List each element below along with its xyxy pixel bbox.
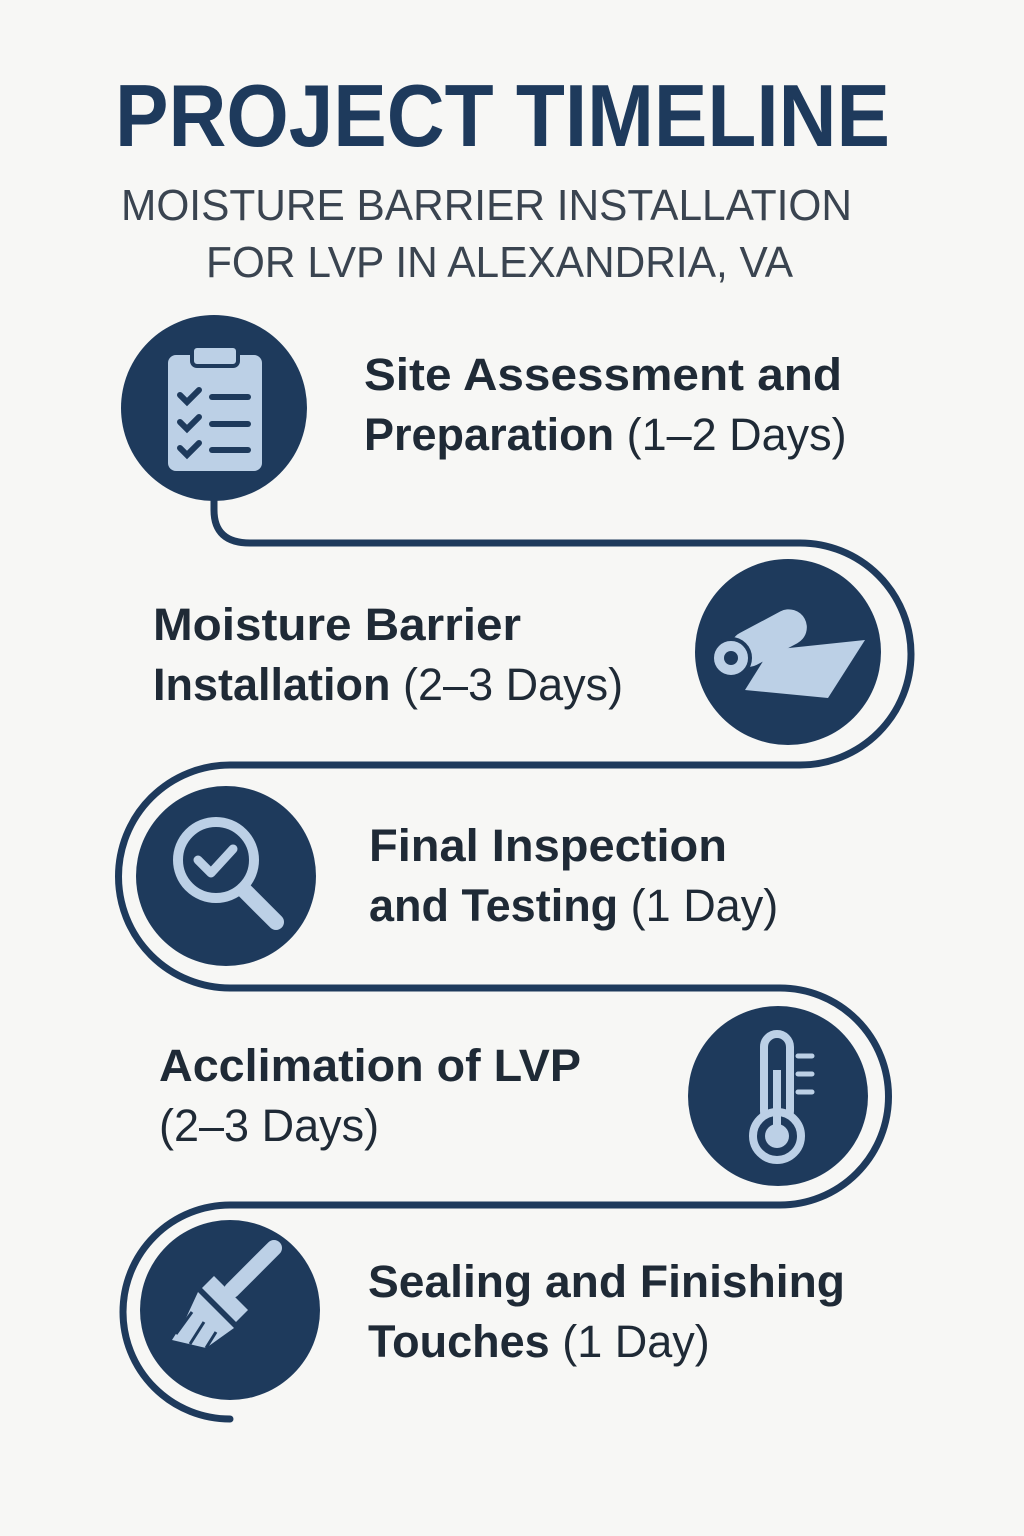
subtitle: [121, 181, 852, 287]
text: Site Assessment and: [364, 349, 842, 400]
text: Preparation (1–2 Days): [364, 409, 847, 460]
timeline path: [119, 495, 911, 1419]
text: (2–3 Days): [159, 1100, 379, 1151]
icon: thermometer: [688, 1006, 868, 1186]
step 4: acclimation: [159, 1006, 868, 1186]
text: Final Inspection: [369, 820, 727, 871]
text: Moisture Barrier: [153, 599, 521, 650]
icon: paint brush: [140, 1220, 320, 1400]
text: [364, 349, 847, 460]
step 1: site assessment: [121, 315, 847, 501]
title: PROJECT TIMELINE: [115, 66, 890, 165]
icon: clipboard: [121, 315, 307, 501]
text: Acclimation of LVP: [159, 1040, 581, 1091]
subtitle: FOR LVP IN ALEXANDRIA, VA: [206, 238, 794, 287]
text: [369, 820, 778, 931]
step 5: sealing: [140, 1220, 845, 1400]
text: Sealing and Finishing: [368, 1256, 845, 1307]
text: Installation (2–3 Days): [153, 659, 623, 710]
icon: magnifier check: [136, 786, 316, 966]
icon: roll: [695, 559, 881, 745]
step 2: moisture barrier installation: [153, 559, 881, 745]
step 3: final inspection: [136, 786, 778, 966]
text: [153, 599, 623, 710]
subtitle: MOISTURE BARRIER INSTALLATION: [121, 181, 852, 230]
text: [159, 1040, 581, 1151]
text: Touches (1 Day): [368, 1316, 710, 1367]
text: and Testing (1 Day): [369, 880, 778, 931]
text: [368, 1256, 845, 1367]
